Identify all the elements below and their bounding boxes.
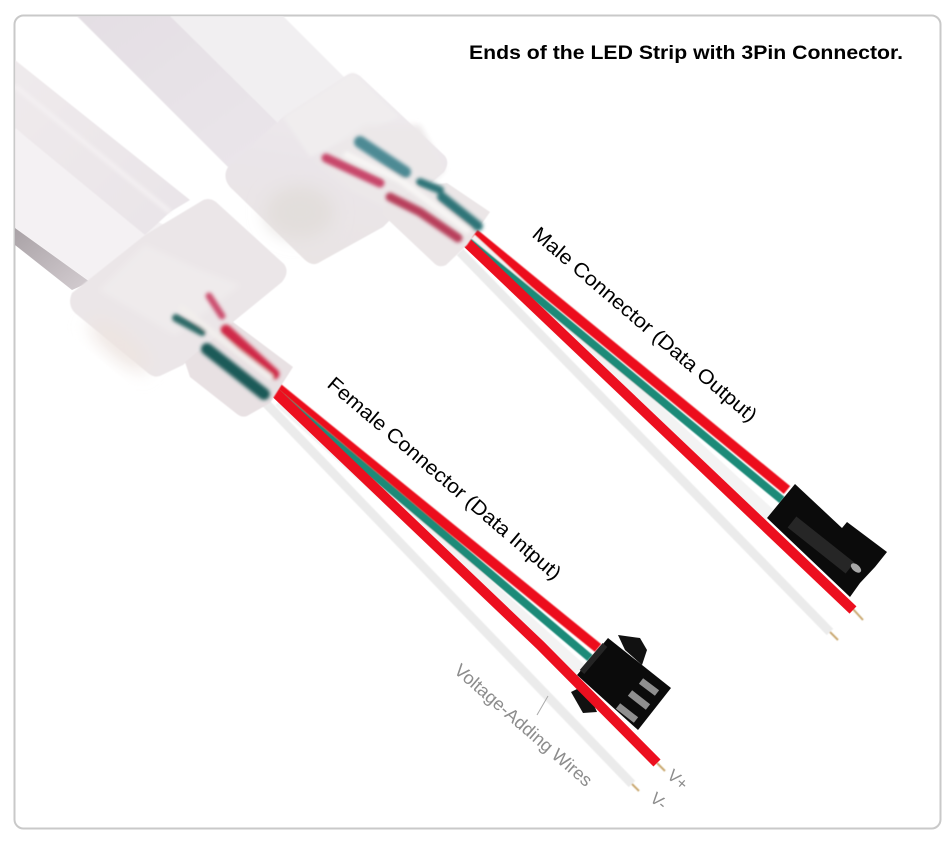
leader line: [537, 696, 548, 715]
upper end cap: [225, 73, 490, 266]
lower red wire: [262, 380, 657, 763]
lower wire tips: [632, 763, 665, 791]
lower strip highlight: [15, 86, 170, 212]
female connector: [571, 635, 671, 730]
lower strip grey edge: [15, 228, 90, 290]
lower embedded wires: [176, 296, 274, 394]
label: female connector: Female Connector (Data Intput): [323, 373, 565, 585]
lower sleeve: [185, 322, 293, 417]
upper strip lit face: [170, 16, 344, 122]
title: Ends of the LED Strip with 3Pin Connector.: [469, 42, 903, 64]
upper sleeve: [382, 183, 490, 266]
label: V-: V-: [646, 789, 671, 814]
label: male connector: Male Connector (Data Output): [528, 223, 761, 427]
male red wire: [463, 239, 853, 610]
male connector: [463, 239, 887, 610]
upper wire tips: [830, 609, 863, 640]
lower strip lit face: [15, 128, 170, 282]
upper strip side: [78, 16, 276, 167]
lower end cap: [70, 199, 293, 417]
lower strip upper side: [15, 60, 190, 235]
upper wires: [460, 226, 863, 640]
lower wires: [258, 380, 665, 791]
label: V+: V+: [663, 766, 692, 794]
label: voltage-adding wires: Voltage-Adding Wires: [450, 660, 596, 790]
upper embedded wires: [326, 142, 478, 238]
